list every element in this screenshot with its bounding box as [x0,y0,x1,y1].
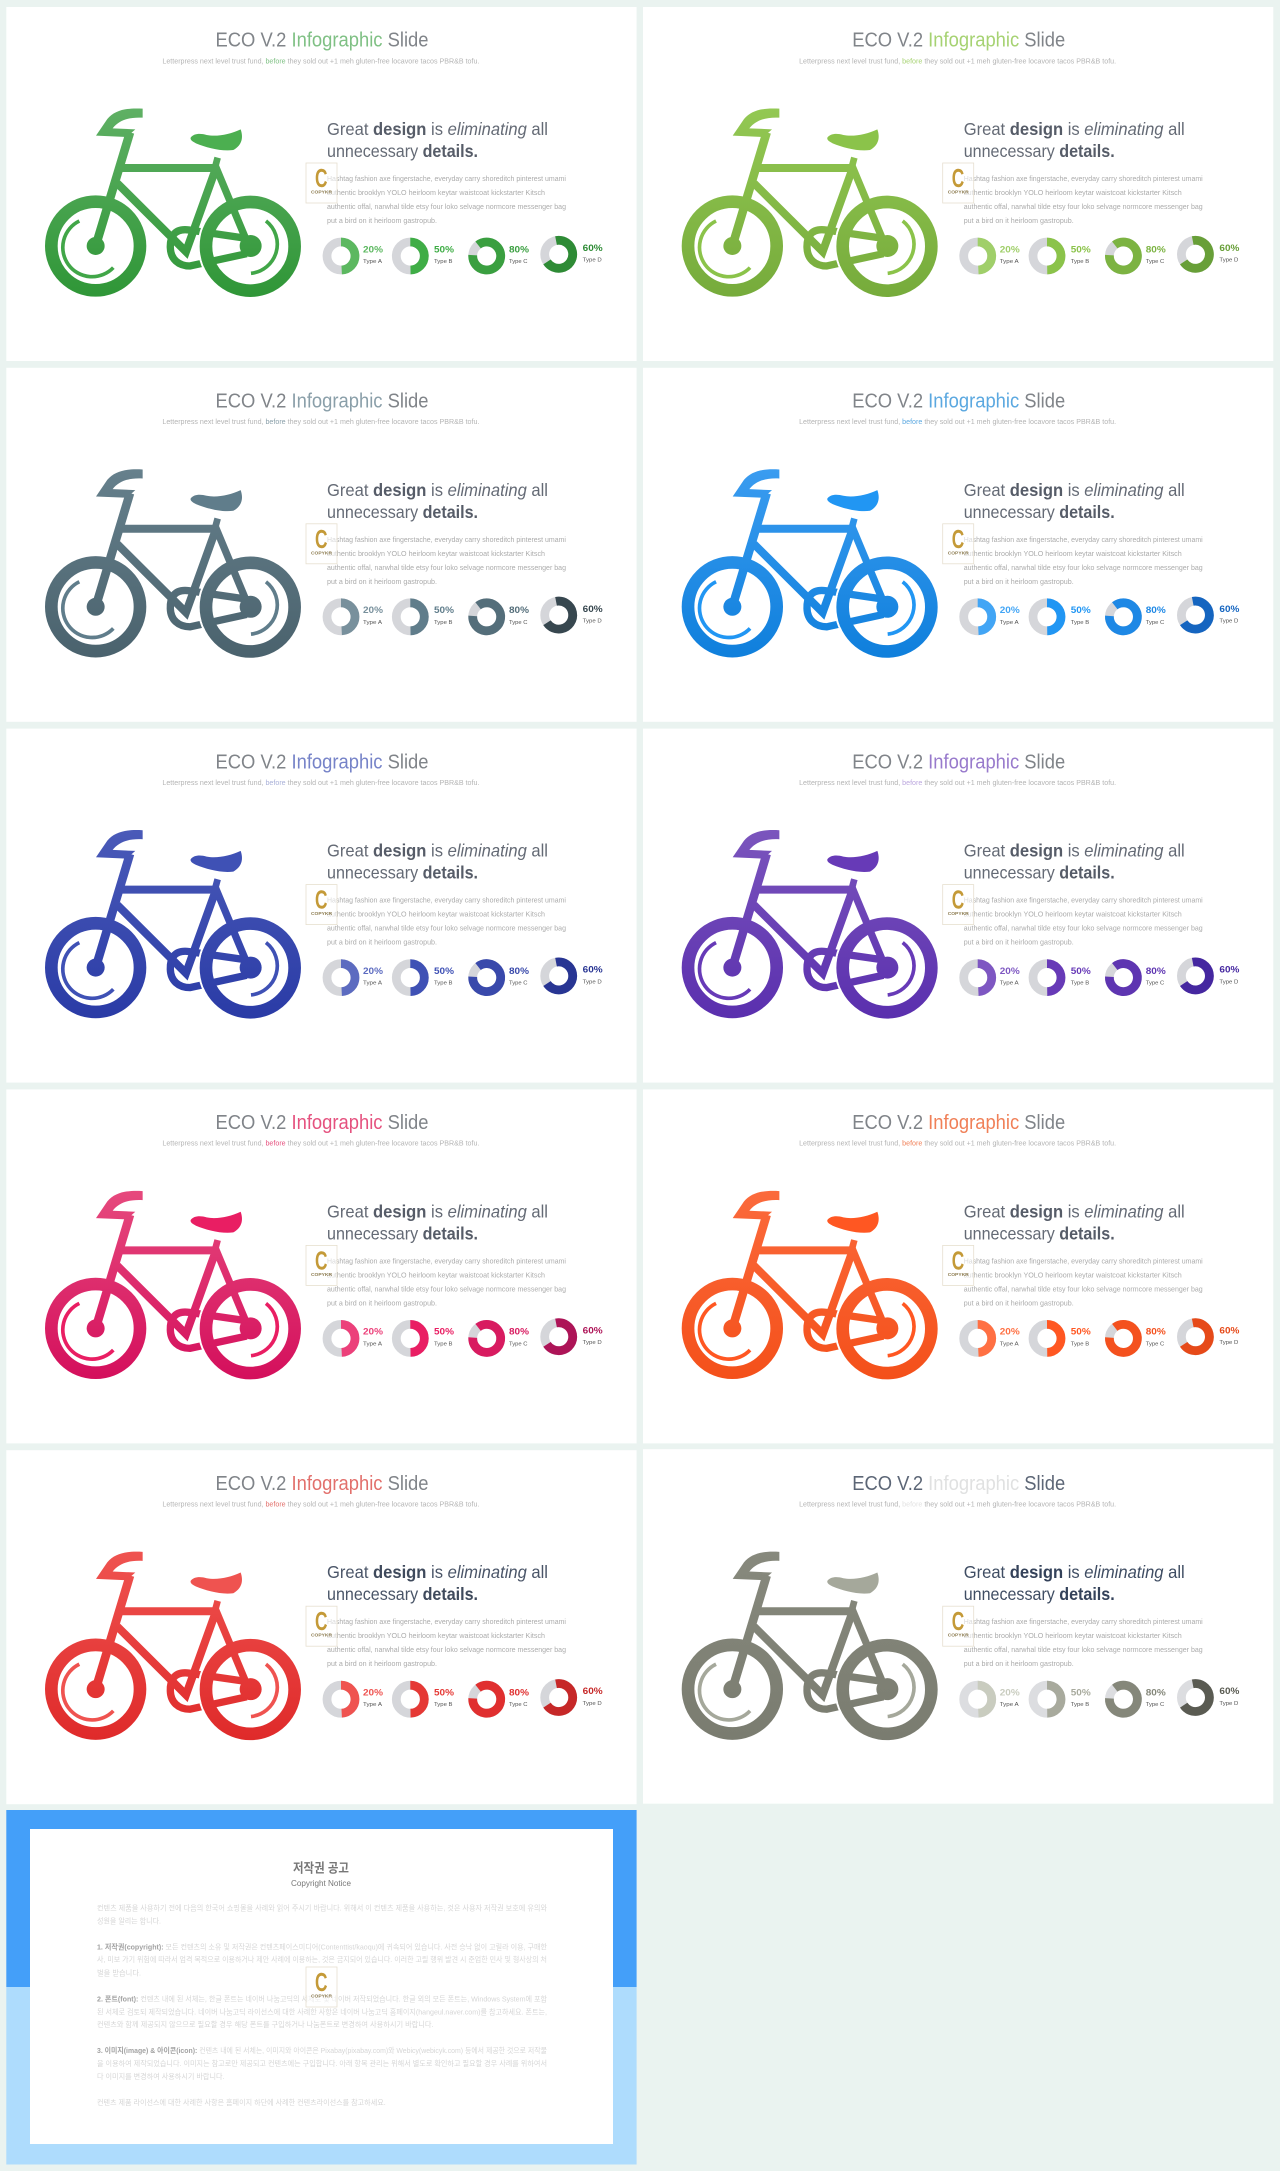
text block: copyright body: 컨텐츠 제품 라이선스에 대한 사례한 사항은 홈페이지 하단에 사례한 컨텐츠라이선스를 참고하세요. [97,2097,386,2107]
text block: copyright body: 된 서체로 검토되 제작되었습니다. 네이버 나눔고딕 라이선스에 대한 사례한 사항은 네이버 나눔고딕 홈페이지(hangeul.naver.com)를 참고하세요. 폰트는, [97,2007,547,2017]
icon: logo watermark [943,1245,974,1285]
icon: logo watermark: COPYKR [948,550,970,555]
donut: Type D: 60% [583,1325,603,1336]
icon: logo watermark: C [952,1245,964,1275]
panel: red slide [6,1450,637,1804]
icon: logo watermark [943,1606,974,1646]
body text: put a bird on it heirloom gastropub. [964,579,1074,586]
donut: Type A: Type A [363,620,382,626]
text block: copyright body: 다 이미지를 변경하여 사용하시기 바랍니다. [97,2071,224,2081]
donut: Type B: Type B [434,259,453,265]
body text: Hashtag fashion axe fingerstache, everyday carry shoreditch pinterest umami [327,1258,566,1265]
donut: Type C: Type C [1146,981,1164,987]
donut: Type D: Type D [1219,1701,1238,1707]
headline: Great design is eliminating all [964,841,1185,861]
icon: logo watermark: COPYKR [311,1994,333,1998]
body text: authentic brooklyn YOLO heirloom keytar waistcoat kickstarter Kitsch [964,190,1182,197]
donut: Type B: 50% [434,1687,455,1698]
panel: blue slide [643,368,1273,722]
headline: Great design is eliminating all [964,1562,1185,1582]
icon: bicycle [51,1191,302,1380]
body text: authentic offal, narwhal tilde etsy four loko selvage normcore messenger bag [964,565,1203,572]
body text: authentic offal, narwhal tilde etsy four loko selvage normcore messenger bag [327,1647,566,1654]
icon: logo watermark [943,163,974,203]
panel: indigo slide [6,729,637,1083]
subtitle: Letterpress next level trust fund, before they sold out +1 meh gluten-free locavore tacos PBR&B tofu. [162,780,479,787]
donut: Type B [1033,1324,1091,1352]
icon: logo watermark [306,163,337,203]
headline line 2: unnecessary details. [964,863,1115,883]
donut: Type C: Type C [509,259,528,265]
headline: Great design is eliminating all [327,1201,548,1221]
body text: Hashtag fashion axe fingerstache, everyday carry shoreditch pinterest umami [964,1258,1203,1265]
donut: Type C: 80% [1146,1687,1166,1698]
text block: copyright body: 1. 저작권(copyright): 모든 컨텐츠의 소유 및 저작권은 컨텐츠페이스미디어(Contenttist/kaoqu)에 귀속되어 있습니다. 사전 승낙 없이 고릴라 이용, 구매한 [97,1941,547,1951]
icon: bicycle [51,1552,302,1741]
donut: Type A: 20% [1000,966,1020,977]
icon: logo watermark: COPYKR [948,1272,970,1277]
body text: authentic brooklyn YOLO heirloom keytar waistcoat kickstarter Kitsch [964,551,1182,558]
donut: Type A: 20% [1000,1687,1020,1698]
donut: Type B: 50% [434,244,455,255]
body text: Hashtag fashion axe fingerstache, everyday carry shoreditch pinterest umami [327,898,566,905]
headline: Great design is eliminating all [964,1201,1185,1221]
donut: Type D: Type D [1219,258,1238,264]
donut: Type A: Type A [1000,1341,1019,1347]
body text: authentic offal, narwhal tilde etsy four loko selvage normcore messenger bag [964,204,1203,211]
icon: logo watermark: COPYKR [948,911,970,916]
donut: Type A: Type A [1000,259,1019,265]
donut: Type C [1104,958,1166,997]
donut: Type C: 80% [1146,1327,1166,1338]
donut: Type C: 80% [509,1327,530,1338]
donut: Type B [1033,242,1091,270]
body text: authentic offal, narwhal tilde etsy four loko selvage normcore messenger bag [964,926,1203,933]
headline line 2: unnecessary details. [964,141,1115,161]
subtitle: Letterpress next level trust fund, before they sold out +1 meh gluten-free locavore tacos PBR&B tofu. [799,1501,1116,1508]
icon: logo watermark: C [315,1245,328,1275]
donut: Type C: Type C [509,1341,528,1347]
donut: Type D: 60% [1219,1686,1240,1697]
donut: Type B [396,242,455,270]
icon: logo watermark: C [952,1606,964,1636]
donut: Type B: Type B [434,1702,453,1708]
body text [964,176,1203,225]
body text: authentic brooklyn YOLO heirloom keytar waistcoat kickstarter Kitsch [964,1633,1182,1640]
icon: bicycle [51,108,302,298]
body text: authentic offal, narwhal tilde etsy four loko selvage normcore messenger bag [327,565,566,572]
body text: put a bird on it heirloom gastropub. [327,1661,437,1668]
panel: orange slide [643,1089,1273,1443]
donut: Type D [542,1320,603,1353]
icon: logo watermark: C [315,1967,328,1997]
title: ECO V.2 Infographic Slide [852,390,1065,412]
icon: logo watermark: COPYKR [311,1633,333,1638]
donut: Type B [396,964,455,992]
headline line 2: unnecessary details. [327,1584,478,1604]
icon: logo watermark: C [315,163,328,193]
donut: Type D: 60% [583,1686,603,1697]
text block: copyright body: 2. 폰트(font): 컨텐츠 내에 된 서체는, 한글 폰트는 네이버 나눔고딕의 서체로 및 네이버 저작되었습니다. 한글 외의 모든 폰트는, Windows System에 포함 [97,1993,547,2003]
headline: Great design is eliminating all [964,480,1185,500]
donut: Type A: Type A [1000,620,1019,626]
subtitle: Letterpress next level trust fund, before they sold out +1 meh gluten-free locavore tacos PBR&B tofu. [799,419,1116,426]
donut: Type D: 60% [1219,604,1240,615]
donut: Type D: 60% [583,965,603,976]
donut: Type A [964,1685,1020,1713]
subtitle: Letterpress next level trust fund, before they sold out +1 meh gluten-free locavore tacos PBR&B tofu. [799,780,1116,787]
icon: logo watermark [306,885,337,925]
icon: logo watermark: C [315,1606,328,1636]
body text: Hashtag fashion axe fingerstache, everyday carry shoreditch pinterest umami [327,1619,566,1626]
body text: put a bird on it heirloom gastropub. [964,1661,1074,1668]
donut: Type A: Type A [363,1702,382,1708]
donut: Type D: Type D [583,1701,602,1707]
donut: Type C [1104,1319,1166,1358]
donut: Type B: 50% [434,605,455,616]
title: ECO V.2 Infographic Slide [216,1112,428,1134]
donut: Type D: Type D [583,258,602,264]
body text: put a bird on it heirloom gastropub. [964,940,1074,947]
text block: copyright body: 벌을 받습니다. [97,1967,141,1977]
donut: Type B: Type B [1071,620,1090,626]
donut: Type C: 80% [509,244,530,255]
body text [964,1258,1203,1307]
body text: authentic offal, narwhal tilde etsy four loko selvage normcore messenger bag [327,204,566,211]
title: ECO V.2 Infographic Slide [852,30,1065,52]
icon: logo watermark: C [315,885,328,915]
headline line 2: unnecessary details. [327,1223,478,1243]
text block: copyright body: 3. 이미지(image) & 아이콘(icon): 컨텐츠 내에 된 서체는, 이미지와 아이콘은 Pixabay(pixabay.com)와 Webicy(webicyk.com) 등에서 제공한 것으로 저작물 [97,2045,547,2055]
icon: bicycle [688,830,939,1020]
donut: Type C [467,236,530,276]
icon: logo watermark: COPYKR [948,1633,970,1638]
panel: purple slide [643,729,1273,1083]
title: ECO V.2 Infographic Slide [852,751,1065,773]
donut: Type D [1179,959,1240,992]
body text [964,1619,1203,1668]
donut: Type C: 80% [1146,244,1166,255]
body text [964,537,1203,586]
donut: Type A: 20% [1000,1327,1020,1338]
headline: Great design is eliminating all [964,119,1185,139]
panel: copyright notice [6,1810,637,2164]
donut: Type D: Type D [1219,1340,1238,1346]
donut: Type B: Type B [1071,981,1090,987]
donut: Type C [467,958,530,997]
donut: Type D [542,238,603,271]
donut: Type C [467,1680,530,1719]
body text: put a bird on it heirloom gastropub. [964,1300,1074,1307]
headline line 2: unnecessary details. [327,141,478,161]
body text: Hashtag fashion axe fingerstache, everyday carry shoreditch pinterest umami [964,898,1203,905]
text block: copyright body [97,1902,547,2107]
icon: logo watermark: COPYKR [311,190,333,194]
donut: Type B [396,1324,455,1352]
body text: put a bird on it heirloom gastropub. [327,579,437,586]
donut: Type C: Type C [1146,620,1164,626]
panel: pink slide [6,1089,637,1443]
icon: logo watermark: C [952,163,964,193]
donut: Type B [1033,964,1091,992]
donut: Type B: 50% [1071,244,1091,255]
body text: authentic offal, narwhal tilde etsy four loko selvage normcore messenger bag [964,1286,1203,1293]
donut: Type D: 60% [1219,1325,1240,1336]
icon: logo watermark [943,885,974,925]
donut: Type A: Type A [363,981,382,987]
icon: logo watermark: COPYKR [311,550,333,555]
body text [327,176,566,225]
body text: put a bird on it heirloom gastropub. [327,1300,437,1307]
headline line 2: unnecessary details. [327,502,478,522]
icon: bicycle [688,1191,939,1380]
donut: Type B: 50% [1071,1327,1091,1338]
donut: Type C: Type C [1146,1341,1164,1347]
donut: Type B: 50% [1071,966,1091,977]
heading: copyright subtitle: Copyright Notice [291,1879,352,1888]
donut: Type A: 20% [1000,244,1020,255]
icon: logo watermark: C [315,524,328,554]
donut: Type A [964,1324,1020,1352]
icon: logo watermark: COPYKR [948,190,970,194]
donut: Type C: Type C [1146,259,1164,265]
body text: authentic brooklyn YOLO heirloom keytar waistcoat kickstarter Kitsch [327,190,545,197]
donut: Type B: Type B [1071,259,1090,265]
donut: Type D: 60% [583,604,603,615]
donut: Type A: 20% [363,244,384,255]
panel: grey slide [643,1449,1273,1804]
donut: Type D [1179,238,1240,271]
donut: Type D [1179,1681,1240,1714]
headline line 2: unnecessary details. [964,502,1115,522]
donut: Type B: Type B [434,981,453,987]
panel: blue grey slide [6,368,637,722]
panel: light green slide [643,7,1273,361]
donut: Type A: Type A [363,1341,382,1347]
donut: Type B: 50% [1071,605,1091,616]
donut: Type C: Type C [509,620,528,626]
title: ECO V.2 Infographic Slide [216,30,428,52]
donut: Type C [1104,1680,1166,1719]
icon: logo watermark [306,1606,337,1646]
body text: put a bird on it heirloom gastropub. [964,218,1074,225]
body text: Hashtag fashion axe fingerstache, everyday carry shoreditch pinterest umami [327,537,566,544]
donut: Type B: 50% [434,1327,455,1338]
donut: Type C: 80% [1146,966,1166,977]
body text [327,898,566,947]
headline: Great design is eliminating all [327,841,548,861]
body text: authentic brooklyn YOLO heirloom keytar waistcoat kickstarter Kitsch [327,1272,545,1279]
donut: Type B [396,1685,455,1713]
donut: Type C: 80% [1146,605,1166,616]
icon: logo watermark [943,524,974,564]
donut: Type D: Type D [1219,979,1238,985]
donut: Type A: 20% [363,1327,384,1338]
donut: Type A: Type A [1000,981,1019,987]
body text: Hashtag fashion axe fingerstache, everyday carry shoreditch pinterest umami [964,176,1203,183]
headline line 2: unnecessary details. [964,1584,1115,1604]
title: ECO V.2 Infographic Slide [852,1112,1065,1134]
donut: Type C [1104,597,1166,636]
subtitle: Letterpress next level trust fund, before they sold out +1 meh gluten-free locavore tacos PBR&B tofu. [162,419,479,426]
icon: bicycle [688,469,939,659]
donut: Type B: 50% [434,966,455,977]
body text: put a bird on it heirloom gastropub. [327,940,437,947]
icon: bicycle [688,1552,939,1741]
headline line 2: unnecessary details. [964,1223,1115,1243]
subtitle: Letterpress next level trust fund, before they sold out +1 meh gluten-free locavore tacos PBR&B tofu. [162,1141,479,1148]
body text [964,898,1203,947]
donut: Type A [964,964,1020,992]
body text: authentic brooklyn YOLO heirloom keytar waistcoat kickstarter Kitsch [327,551,545,558]
donut: Type C: Type C [509,1702,528,1708]
title: ECO V.2 Infographic Slide [216,390,428,412]
donut: Type D: 60% [583,243,603,254]
body text: put a bird on it heirloom gastropub. [327,218,437,225]
body text: Hashtag fashion axe fingerstache, everyday carry shoreditch pinterest umami [964,1619,1203,1626]
icon: logo watermark [306,1245,337,1285]
donut: Type A: 20% [363,966,384,977]
subtitle: Letterpress next level trust fund, before they sold out +1 meh gluten-free locavore tacos PBR&B tofu. [799,1141,1116,1148]
icon: logo watermark: COPYKR [311,911,333,916]
donut: Type D: Type D [583,618,602,624]
donut: Type D [542,1681,603,1714]
text block: copyright body: 컨텐츠와 함께 제공되지 않으므로 필요할 경우 해당 폰트를 구입하거나 나눔폰트로 변경하여 사용하시기 바랍니다. [97,2019,434,2029]
donut: Type C: Type C [509,981,528,987]
text block: copyright body: 성원을 알리는 합니다. [97,1916,161,1925]
donut: Type B: Type B [434,1341,453,1347]
donut: Type C [467,1319,530,1358]
donut: Type A [964,603,1020,631]
donut: Type C: 80% [509,966,530,977]
body text [327,537,566,586]
donut: Type D: Type D [583,979,602,985]
donut: Type B: Type B [1071,1702,1090,1708]
donut: Type D [1179,599,1240,632]
icon: logo watermark: COPYKR [311,1272,333,1277]
donut: Type D: Type D [1219,618,1238,624]
donut: Type D: 60% [1219,965,1240,976]
body text: authentic brooklyn YOLO heirloom keytar waistcoat kickstarter Kitsch [964,912,1182,919]
body text: authentic offal, narwhal tilde etsy four loko selvage normcore messenger bag [964,1647,1203,1654]
body text: authentic offal, narwhal tilde etsy four loko selvage normcore messenger bag [327,926,566,933]
panel: green slide [6,7,637,361]
donut: Type D: Type D [583,1340,602,1346]
donut: Type A [327,1324,384,1352]
icon: logo watermark: C [952,524,964,554]
text block: copyright body: 을 이용하여 제작되었습니다. 이미지는 참고로만 제공되고 컨텐츠에는 구입합니다. 아래 항목 관리는 위해서 별도로 확인하고 필요할 경우 사례를 위하여서 [97,2058,547,2068]
title: ECO V.2 Infographic Slide [216,751,428,773]
donut: Type A [327,603,384,631]
body text [327,1619,566,1668]
donut: Type B: Type B [1071,1341,1090,1347]
donut: Type C: 80% [509,1687,530,1698]
icon: logo watermark [306,1967,337,2007]
donut: Type A [327,1685,384,1713]
headline line 2: unnecessary details. [327,863,478,883]
title: ECO V.2 Infographic Slide [852,1473,1065,1495]
text block: copyright body: 사, 미보 가기 위험에 따라서 엄격 목적으로 이용하거나 제안 사례에 이용하는, 것은 금지되어 있습니다. 이러한 고릴 행위 발견 시 준엄한 민사 및 형사상의 처 [97,1954,547,1964]
donut: Type C: 80% [509,605,530,616]
icon: logo watermark [306,524,337,564]
donut: Type B: Type B [434,620,453,626]
donut: Type C [1104,236,1166,276]
heading: copyright title: 저작권 공고 [293,1861,349,1876]
donut: Type A: Type A [363,259,382,265]
body text [327,1258,566,1307]
donut: Type A [327,242,384,270]
donut: Type A: Type A [1000,1702,1019,1708]
body text: authentic brooklyn YOLO heirloom keytar waistcoat kickstarter Kitsch [327,912,545,919]
icon: logo watermark: C [952,885,964,915]
donut: Type A: 20% [1000,605,1020,616]
body text: Hashtag fashion axe fingerstache, everyday carry shoreditch pinterest umami [964,537,1203,544]
donut: Type A [327,964,384,992]
donut: Type B: 50% [1071,1687,1091,1698]
donut: Type C: Type C [1146,1702,1164,1708]
donut: Type D: 60% [1219,243,1240,254]
donut: Type A: 20% [363,1687,384,1698]
donut: Type A [964,242,1020,270]
donut: Type C [467,597,530,636]
headline: Great design is eliminating all [327,480,548,500]
headline: Great design is eliminating all [327,1562,548,1582]
icon: bicycle [688,108,939,298]
body text: authentic brooklyn YOLO heirloom keytar waistcoat kickstarter Kitsch [327,1633,545,1640]
title: ECO V.2 Infographic Slide [216,1473,428,1495]
text block: copyright body: 컨텐츠 제품을 사용하기 전에 다음의 한국어 쇼핑몰을 사례와 읽어 주시기 바랍니다. 위해서 이 컨텐츠 제품을 사용하는, 것은 사용자 저작권 보호에 유의와 [97,1902,547,1912]
subtitle: Letterpress next level trust fund, before they sold out +1 meh gluten-free locavore tacos PBR&B tofu. [162,58,479,65]
subtitle: Letterpress next level trust fund, before they sold out +1 meh gluten-free locavore tacos PBR&B tofu. [162,1501,479,1508]
subtitle: Letterpress next level trust fund, before they sold out +1 meh gluten-free locavore tacos PBR&B tofu. [799,58,1116,65]
headline: Great design is eliminating all [327,119,548,139]
body text: authentic offal, narwhal tilde etsy four loko selvage normcore messenger bag [327,1286,566,1293]
icon: bicycle [51,469,302,659]
donut: Type B [1033,1685,1091,1713]
donut: Type B [1033,603,1091,631]
donut: Type A: 20% [363,605,384,616]
donut: Type D [1179,1320,1240,1353]
donut: Type B [396,603,455,631]
body text: Hashtag fashion axe fingerstache, everyday carry shoreditch pinterest umami [327,176,566,183]
icon: bicycle [51,830,302,1020]
donut: Type D [542,959,603,992]
donut: Type D [542,599,603,632]
body text: authentic brooklyn YOLO heirloom keytar waistcoat kickstarter Kitsch [964,1272,1182,1279]
